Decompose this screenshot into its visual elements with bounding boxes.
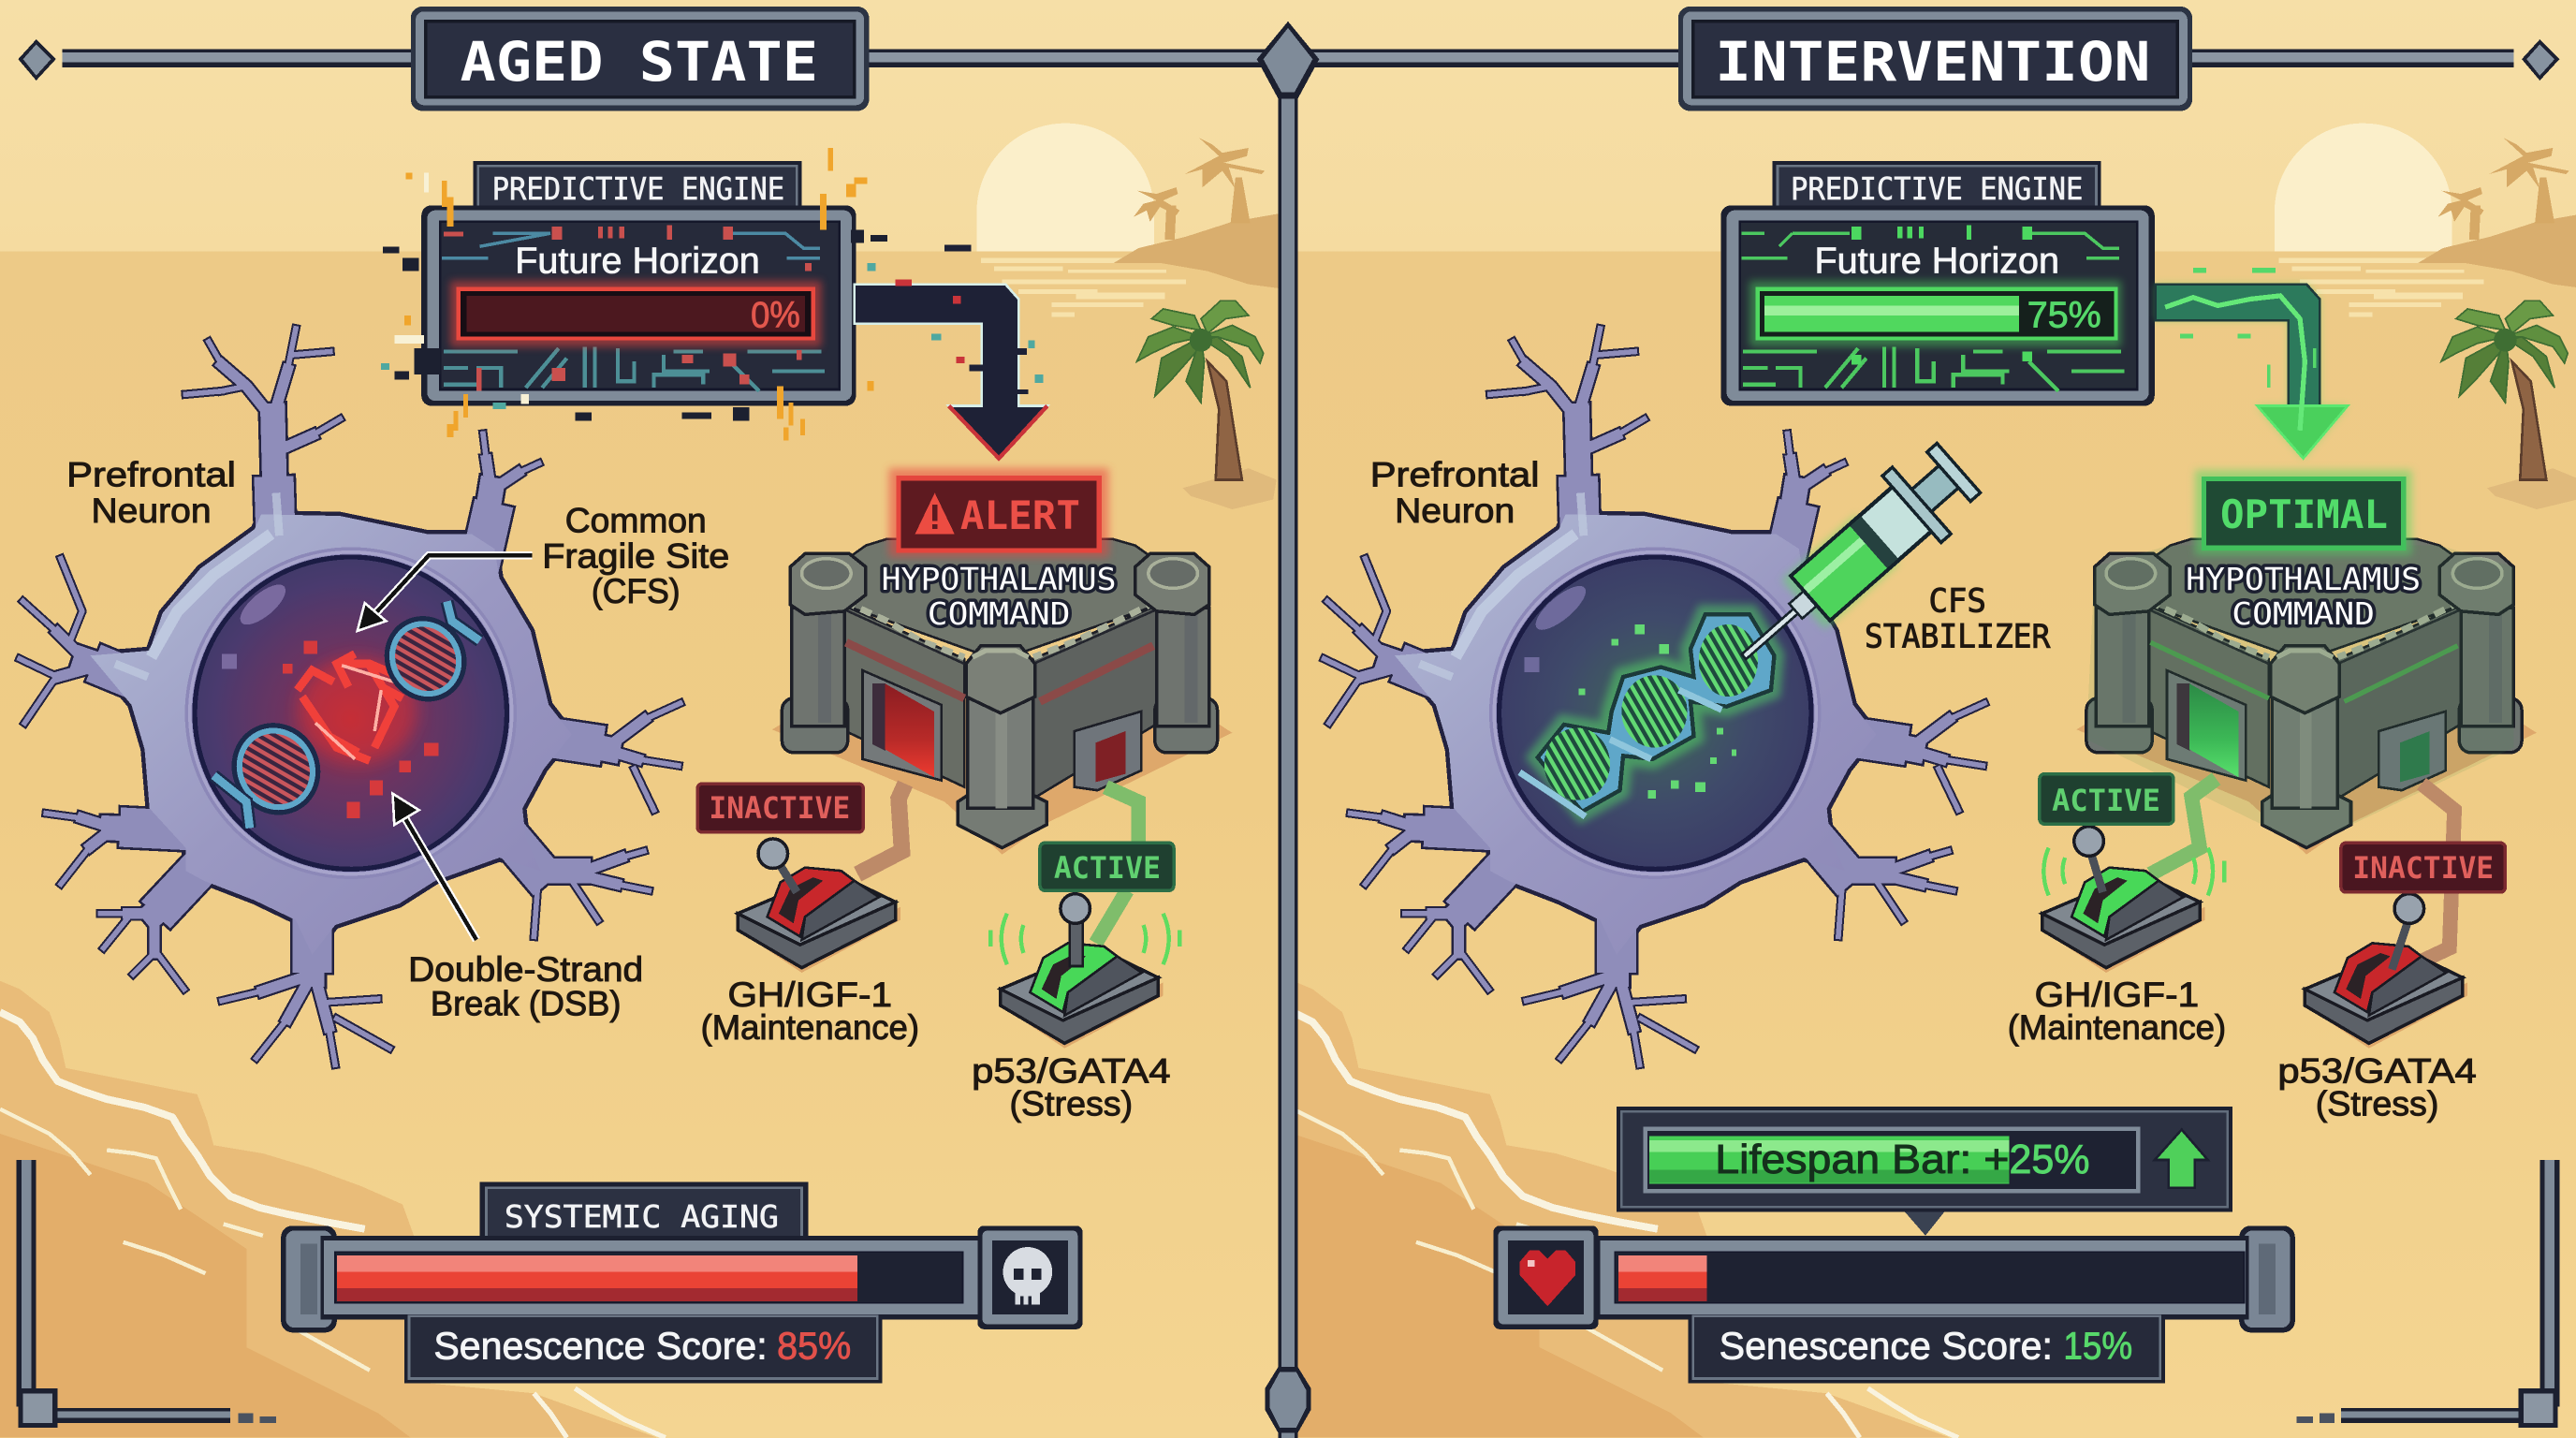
DNA fragment lower left — [213, 710, 334, 829]
DNA fragment upper right — [373, 601, 480, 713]
badge: active left: ACTIVE — [1054, 852, 1161, 886]
badge: optimal — [2195, 470, 2411, 555]
label: double-strand break: Break (DSB) — [431, 985, 621, 1023]
title: aged state — [411, 7, 869, 110]
tab: PREDICTIVE ENGINE — [492, 170, 784, 207]
label: prefrontal neuron left: Prefrontal — [66, 455, 236, 493]
label: GH/IGF-1 left: GH/IGF-1 — [728, 976, 892, 1014]
wet sand left — [0, 981, 657, 1438]
predictive engine left — [381, 148, 887, 440]
island right — [2418, 211, 2576, 291]
senescence score: Senescence Score: — [1720, 1324, 2053, 1367]
distant palms left — [1134, 138, 1265, 240]
lever: GH/IGF-1 active — [2042, 827, 2204, 973]
syringe — [1715, 434, 1988, 690]
neuron left — [20, 329, 681, 1064]
track — [1646, 1129, 2138, 1191]
senescence score: 15% — [2063, 1324, 2132, 1367]
palm right — [2441, 301, 2576, 509]
progress bar 75%: 75% — [2027, 295, 2101, 335]
signal waves GH — [2043, 848, 2224, 895]
label: HYPOTHALAMUS — [2186, 561, 2421, 597]
senescence score — [404, 1316, 883, 1384]
title: aged state: AGED STATE — [460, 30, 818, 94]
wire: GH/IGF-1 active — [2150, 779, 2217, 874]
badge: active right — [2040, 774, 2174, 824]
badge: inactive left — [697, 784, 863, 832]
icon: skull — [977, 1225, 1083, 1329]
label: COMMAND — [928, 595, 1070, 632]
frame — [1720, 205, 2155, 405]
senescence gauge right — [1493, 1225, 2295, 1384]
progress bar 0%: 0% — [751, 295, 800, 335]
fortress left — [772, 539, 1232, 855]
small door green — [2400, 731, 2430, 782]
double strand break glow — [298, 654, 431, 762]
small door red — [1096, 731, 1125, 782]
tab — [480, 1182, 809, 1238]
neuron right — [1325, 329, 1984, 1064]
label: prefrontal neuron right: Prefrontal — [1370, 455, 1540, 493]
label: common fragile site: (CFS) — [592, 572, 681, 610]
arrow pipe: healthy signal — [2156, 268, 2348, 459]
island left — [1114, 211, 1298, 291]
sun right — [2275, 124, 2452, 252]
arrow: common fragile site — [358, 555, 533, 631]
signal waves p53 — [990, 914, 1179, 964]
darker sand right — [1293, 1134, 1704, 1438]
corner bracket left — [17, 1160, 276, 1428]
foam right — [1293, 1012, 1958, 1438]
title: intervention: INTERVENTION — [1715, 30, 2150, 94]
senescence score — [1688, 1316, 2165, 1384]
label: prefrontal neuron left: Neuron — [91, 492, 212, 530]
lever: p53 inactive — [2305, 894, 2467, 1049]
label: double-strand break: Double-Strand — [408, 950, 643, 989]
frame — [421, 205, 856, 405]
systemic aging gauge — [281, 1182, 1083, 1384]
icon: heart — [1493, 1225, 1599, 1329]
label: common fragile site: Fragile Site — [542, 536, 729, 575]
stabilized DNA — [1519, 614, 1774, 816]
end cap — [281, 1225, 337, 1332]
label: p53/GATA4 left: p53/GATA4 — [972, 1052, 1171, 1091]
badge: alert — [889, 468, 1109, 557]
debris — [283, 640, 439, 818]
arrow pipe: broken signal — [855, 244, 1047, 459]
label: GH/IGF-1 right: GH/IGF-1 — [2035, 976, 2199, 1014]
label: prefrontal neuron right: Neuron — [1395, 492, 1515, 530]
darker sand left — [0, 1134, 411, 1438]
label: p53/GATA4 left: (Stress) — [1010, 1085, 1133, 1123]
corner bracket right — [2297, 1160, 2559, 1428]
wet sand right — [1293, 981, 1950, 1438]
lifespan bar callout — [1617, 1107, 2232, 1236]
progress bar 0% — [450, 281, 822, 346]
energy bands — [2150, 642, 2458, 701]
label: CFS stabilizer: STABILIZER — [1865, 617, 2051, 655]
lever: GH/IGF-1 inactive — [738, 839, 900, 973]
fortress right — [2076, 539, 2537, 855]
predictive engine right — [1720, 161, 2155, 405]
lifespan text: Lifespan Bar: + — [1715, 1137, 2009, 1182]
sun left — [976, 124, 1154, 252]
green tint — [2086, 546, 2513, 846]
badge: alert: ALERT — [960, 492, 1080, 538]
label: CFS stabilizer: CFS — [1928, 582, 1986, 621]
future horizon text: Future Horizon — [515, 241, 760, 281]
palm left — [1137, 301, 1277, 509]
bar — [320, 1236, 981, 1319]
label: p53/GATA4 right: (Stress) — [2316, 1085, 2438, 1123]
gate red — [885, 683, 934, 777]
bar — [1597, 1236, 2249, 1319]
foam left — [0, 1012, 666, 1438]
wire: GH/IGF-1 inactive — [857, 784, 905, 874]
nucleus right — [1500, 557, 1811, 869]
lever: p53 active — [1001, 894, 1164, 1049]
badge: active left — [1040, 843, 1174, 890]
badge: inactive left: INACTIVE — [709, 792, 850, 826]
progress bar 75% — [1749, 281, 2121, 346]
senescence score: 85% — [777, 1324, 851, 1367]
badge: optimal: OPTIMAL — [2220, 492, 2388, 537]
reflection right — [2278, 258, 2484, 317]
label: GH/IGF-1 left: (Maintenance) — [701, 1008, 919, 1047]
wire: p53 active — [1096, 787, 1138, 943]
distant palms right — [2438, 138, 2569, 240]
reflection left — [981, 258, 1186, 317]
nucleus left — [195, 557, 506, 869]
arrow: double-strand break — [393, 794, 476, 940]
gate green — [2189, 683, 2238, 777]
tab: PREDICTIVE ENGINE — [1791, 170, 2083, 207]
wire: p53 inactive — [2422, 784, 2454, 961]
future horizon text: Future Horizon — [1814, 241, 2059, 281]
title: intervention — [1678, 7, 2192, 110]
lifespan value: 25% — [2009, 1137, 2089, 1182]
label: HYPOTHALAMUS — [882, 561, 1117, 597]
badge: active right: ACTIVE — [2052, 785, 2160, 818]
icon: up arrow — [2155, 1130, 2208, 1188]
circuit traces — [1741, 225, 2124, 391]
label: GH/IGF-1 right: (Maintenance) — [2008, 1008, 2226, 1047]
label: p53/GATA4 right: p53/GATA4 — [2277, 1052, 2477, 1091]
circuit traces — [442, 225, 825, 391]
label: COMMAND — [2232, 595, 2375, 632]
tab — [1773, 161, 2101, 211]
badge: inactive right: INACTIVE — [2352, 852, 2494, 886]
badge: inactive right — [2341, 843, 2505, 892]
senescence score: Senescence Score: — [433, 1324, 768, 1367]
end cap — [2239, 1225, 2295, 1332]
tab — [474, 161, 802, 211]
tab: SYSTEMIC AGING — [505, 1198, 779, 1235]
green particles — [1579, 624, 1736, 799]
glitch sparks — [381, 148, 887, 440]
label: common fragile site: Common — [565, 502, 707, 540]
damage bands — [846, 642, 1153, 701]
